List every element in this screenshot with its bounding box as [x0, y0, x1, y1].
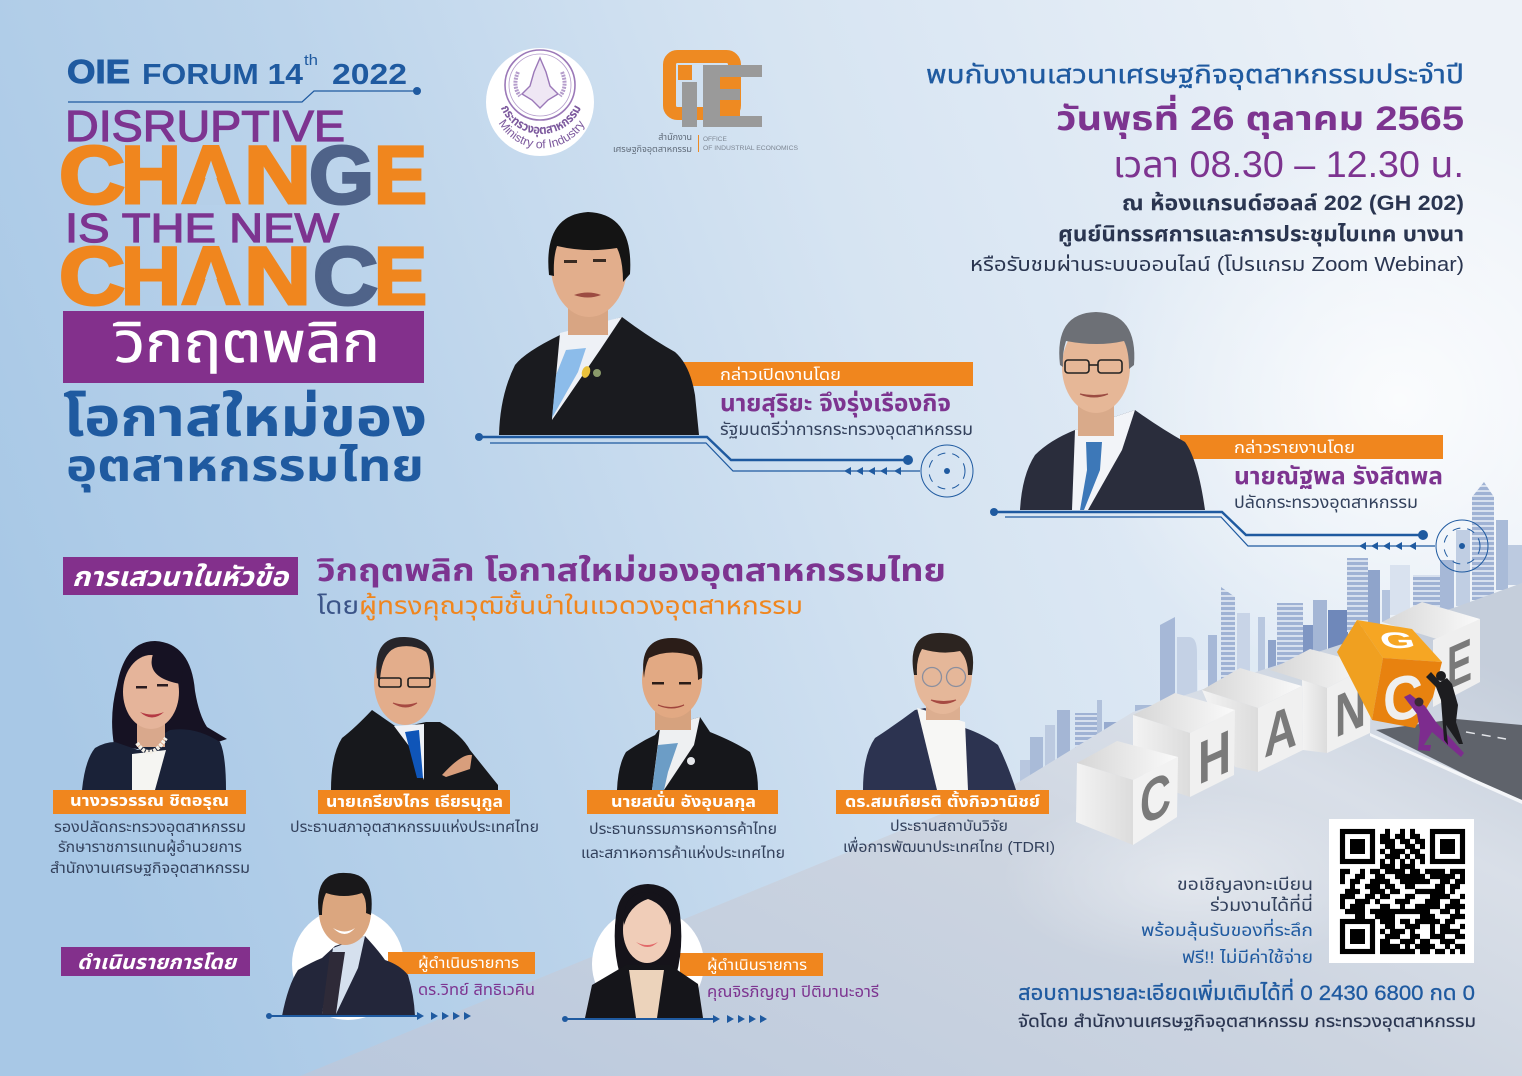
panelist 4 [836, 633, 1055, 856]
Thai title line 2: อุตสาหกรรมไทย [66, 442, 424, 493]
orange label [388, 952, 535, 974]
event online: หรือรับชมผ่านระบบออนไลน์ (โปรแกรม Zoom Webinar) [970, 253, 1464, 276]
cube G orange [1337, 620, 1442, 736]
forum line: FORUM 14 [142, 59, 303, 91]
city skyline [1020, 482, 1522, 790]
DISRUPTIVE: DISRUPTIVE [65, 102, 345, 151]
portrait [499, 212, 699, 435]
name badge [318, 790, 510, 814]
moderator 2 [562, 884, 879, 1023]
registration text: พร้อมลุ้นรับของที่ระลึก [1141, 918, 1313, 941]
topic subtitle: โดยผู้ทรงคุณวุฒิชั้นนำในแวดวงอุตสาหกรรม [317, 589, 803, 621]
CHANCE word: A [181, 231, 241, 322]
CHANCE word [59, 231, 427, 322]
CHANCE word: C [59, 231, 125, 322]
portrait [585, 884, 703, 1018]
topic title: วิกฤตพลิก โอกาสใหม่ของอุตสาหกรรมไทย [317, 553, 946, 589]
role: และสภาหอการค้าแห่งประเทศไทย [581, 844, 785, 862]
event venue: ณ ห้องแกรนด์ฮอลล์ 202 (GH 202) [1122, 192, 1464, 215]
pointer line [266, 1012, 471, 1020]
name: นายสุริยะ จึงรุ่งเรืองกิจ [720, 389, 951, 418]
registration text [1141, 875, 1313, 967]
role: รักษาราชการแทนผู้อำนวยการ [58, 839, 242, 856]
orange label: ผู้ดำเนินรายการ [418, 955, 519, 972]
role: เพื่อการพัฒนาประเทศไทย (TDRI) [843, 836, 1055, 856]
road [1370, 719, 1522, 804]
CHANGE word: C [59, 130, 125, 221]
role: รองปลัดกระทรวงอุตสาหกรรม [54, 819, 246, 836]
role [843, 818, 1055, 856]
figure pushing: purple [1404, 694, 1464, 757]
logo: Ministry of Industry: กระทรวงอุตสาหกรรม [501, 105, 580, 138]
position: ปลัดกระทรวงอุตสาหกรรม [1234, 493, 1418, 513]
logo: Ministry of Industry [486, 48, 594, 156]
portrait [82, 641, 227, 790]
event details [926, 59, 1464, 276]
event place: ศูนย์นิทรรศการและการประชุมไบเทค บางนา [1058, 223, 1464, 247]
cube N: N [1335, 671, 1366, 751]
panelist 1 [50, 641, 250, 877]
logo: OIE: OF INDUSTRIAL ECONOMICS [703, 145, 799, 152]
cube E: E [1447, 625, 1472, 703]
cube H: H [1198, 717, 1231, 798]
CHANGE word: E [374, 130, 427, 221]
organizer line: จัดโดย สำนักงานเศรษฐกิจอุตสาหกรรม กระทรวงอุตสาหกรรม [1018, 1012, 1476, 1032]
logo: Ministry of Industry: Ministry of Industry [498, 119, 585, 148]
role [581, 821, 785, 862]
role: สำนักงานเศรษฐกิจอุตสาหกรรม [50, 860, 250, 877]
cube H [1133, 693, 1235, 798]
contact line: สอบถามรายละเอียดเพิ่มเติมได้ที่ 0 2430 6800 กด 0 [1018, 978, 1475, 1005]
cube A: A [1264, 692, 1297, 771]
speaker 2: report [990, 312, 1488, 572]
event time: เวลา 08.30 – 12.30 น. [1113, 144, 1464, 185]
orange label: กล่าวเปิดงานโดย [720, 366, 841, 384]
orange label [1180, 435, 1443, 459]
moderator badge [61, 947, 250, 976]
registration text: ขอเชิญลงทะเบียน [1177, 875, 1313, 894]
Thai title line 1: โอกาสใหม่ของ [63, 388, 427, 448]
IS THE NEW: IS THE NEW [65, 205, 339, 251]
orange label [680, 362, 973, 386]
event intro: พบกับงานเสวนาเศรษฐกิจอุตสาหกรรมประจำปี [926, 59, 1464, 90]
purple title bar [63, 311, 424, 383]
orange label [680, 953, 823, 976]
forum topic [63, 553, 946, 621]
name: คุณจิรภิญญา ปิติมานะอารี [707, 984, 879, 1001]
white circle [292, 908, 404, 1020]
forum line [67, 52, 421, 102]
name: ดร.วิทย์ สิทธิเวคิน [418, 982, 535, 999]
portrait [1020, 312, 1205, 510]
panelist 2 [290, 637, 539, 836]
white circle [592, 908, 704, 1020]
speaker 1: opening [475, 212, 973, 497]
ground highlight [1000, 790, 1380, 970]
CHANGE word: H [121, 130, 181, 221]
name badge: ดร.สมเกียรติ ตั้งกิจวานิชย์ [845, 791, 1040, 811]
cube E [1382, 602, 1480, 707]
CHANCE word: E [374, 231, 427, 322]
logo: OIE: สำนักงาน [658, 132, 692, 142]
title block [59, 52, 427, 493]
panelist 3 [581, 638, 785, 862]
topic badge [63, 557, 298, 595]
purple title bar: วิกฤตพลิก [113, 311, 380, 374]
role [50, 819, 250, 877]
CHANGE word: N [244, 130, 311, 221]
portrait [282, 873, 415, 1016]
logo: OIE [613, 56, 799, 154]
cube C [1076, 741, 1178, 845]
name badge: นายเกรียงไกร เธียรนุกูล [326, 794, 503, 812]
QR code [1329, 819, 1474, 963]
CHANGE word: G [309, 130, 374, 221]
background glow [1080, 100, 1522, 700]
name badge: นางวรวรรณ ชิตอรุณ [70, 793, 229, 810]
cube G orange: G [1375, 627, 1419, 653]
name badge [836, 790, 1049, 814]
forum line: th [304, 52, 318, 69]
CHANCE word: H [121, 231, 181, 322]
cube A [1202, 668, 1303, 772]
role: ประธานสถาบันวิจัย [890, 818, 1008, 835]
logo: OIE: OFFICE [703, 136, 727, 143]
topic badge: การเสวนาในหัวข้อ [72, 562, 290, 592]
name: นายณัฐพล รังสิตพล [1234, 463, 1443, 490]
pointer line [562, 1015, 767, 1023]
logo: OIE: เศรษฐกิจอุตสาหกรรม [613, 144, 692, 154]
cube N [1270, 649, 1371, 753]
orange label: กล่าวรายงานโดย [1234, 439, 1355, 457]
orange label: ผู้ดำเนินรายการ [707, 957, 807, 974]
event date: วันพุธที่ 26 ตุลาคม 2565 [1056, 94, 1464, 139]
name badge [587, 790, 778, 814]
moderator badge: ดำเนินรายการโดย [77, 952, 238, 974]
CHANGE word: A [181, 130, 241, 221]
ground [300, 583, 1522, 1076]
registration text: ร่วมงานได้ที่นี่ [1210, 893, 1313, 915]
portrait [617, 638, 758, 790]
CHANGE word [59, 130, 427, 221]
CHANCE word: N [244, 231, 311, 322]
circuit lines [475, 433, 973, 497]
forum line: 2022 [332, 59, 407, 91]
portrait [863, 633, 1016, 790]
role: ประธานสภาอุตสาหกรรมแห่งประเทศไทย [290, 818, 539, 836]
cube G orange: C [1383, 662, 1423, 736]
CHANGE cubes [1076, 602, 1480, 845]
name badge [53, 790, 246, 814]
position: รัฐมนตรีว่าการกระทรวงอุตสาหกรรม [720, 420, 973, 440]
CHANCE word: C [313, 231, 378, 322]
name badge: นายสนั่น อังอุบลกุล [611, 791, 756, 811]
forum line: OIE [67, 53, 130, 90]
registration text: ฟรี!! ไม่มีค่าใช้จ่าย [1182, 947, 1313, 967]
circuit lines [990, 508, 1488, 572]
portrait [331, 637, 498, 790]
moderator 1 [266, 873, 535, 1020]
figure pushing: black [1426, 671, 1463, 745]
role: ประธานกรรมการหอการค้าไทย [589, 821, 777, 838]
cube C: C [1140, 759, 1171, 839]
